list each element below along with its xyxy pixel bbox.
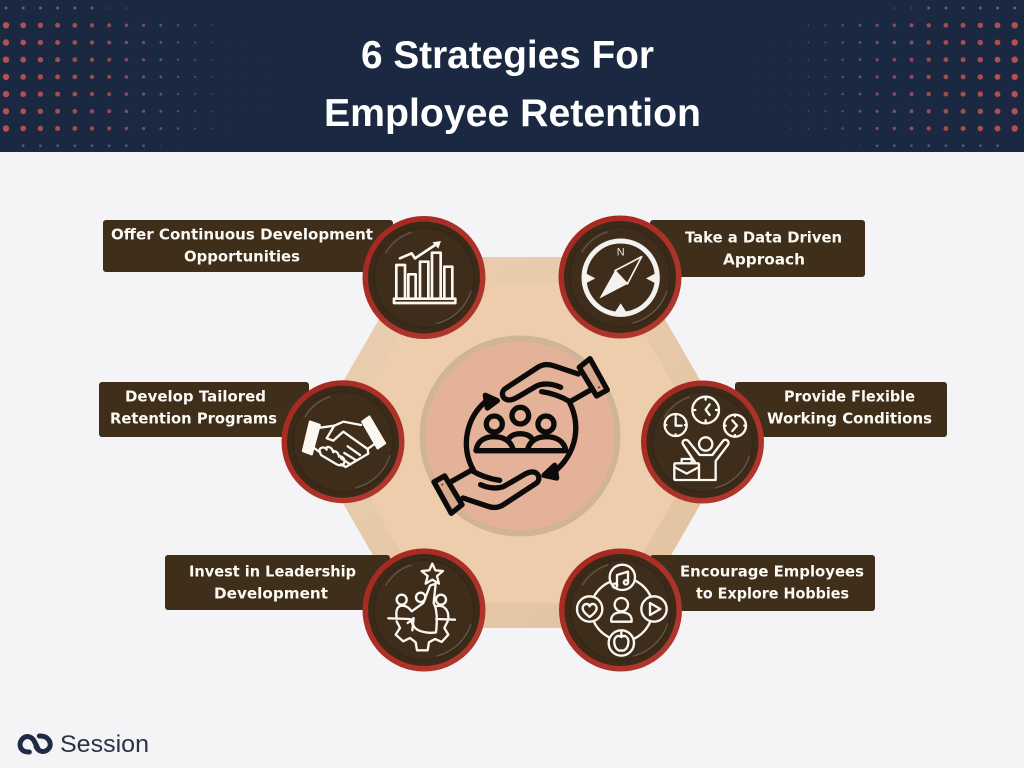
label: Offer Continuous Development Opportunities: Opportunities <box>184 248 300 266</box>
label: Encourage Employees to Explore Hobbies: to Explore Hobbies <box>696 584 849 602</box>
title: 6 Strategies For <box>361 34 654 77</box>
badge: hobbies <box>559 548 682 672</box>
icon: clocks and person <box>665 397 746 480</box>
Session logo <box>20 731 149 758</box>
label: Develop Tailored Retention Programs <box>99 382 309 437</box>
label: Invest in Leadership Development: Invest in Leadership <box>189 562 356 580</box>
badge: compass <box>558 216 682 338</box>
badge: flexible working <box>641 380 764 504</box>
central icon: hands and team <box>434 359 607 513</box>
label: Provide Flexible Working Conditions <box>735 382 947 437</box>
label: Develop Tailored Retention Programs: Develop Tailored <box>125 388 266 406</box>
label: Take a Data Driven Approach: Take a Data Driven <box>685 228 842 246</box>
label: Offer Continuous Development Opportunities <box>103 220 393 272</box>
icon: linked loops <box>20 736 50 752</box>
label: Encourage Employees to Explore Hobbies <box>650 555 875 611</box>
label: Offer Continuous Development Opportunities: Offer Continuous Development <box>111 226 373 244</box>
icon: person with hobbies <box>577 565 667 656</box>
label: Develop Tailored Retention Programs: Retention Programs <box>110 410 277 428</box>
label: Encourage Employees to Explore Hobbies: Encourage Employees <box>680 562 864 580</box>
badge: handshake <box>282 380 404 503</box>
label: Invest in Leadership Development <box>165 555 390 610</box>
label: Invest in Leadership Development: Development <box>214 584 328 602</box>
icon: bar chart <box>394 241 455 303</box>
wordmark: Session <box>60 731 149 758</box>
central hexagon <box>331 277 713 608</box>
dot pattern left <box>6 8 264 146</box>
header band <box>0 0 1024 152</box>
badge: leadership <box>362 548 486 672</box>
icon: star, team and gear <box>388 564 455 650</box>
center circle <box>422 338 618 534</box>
label: Take a Data Driven Approach: Approach <box>723 250 805 268</box>
label: Provide Flexible Working Conditions: Provide Flexible <box>784 388 915 406</box>
icon: compass: N <box>617 247 625 259</box>
label: Provide Flexible Working Conditions: Working Conditions <box>767 410 932 428</box>
upper hand <box>502 359 607 402</box>
title <box>324 34 701 135</box>
icon: handshake <box>303 417 385 467</box>
title: Employee Retention <box>324 92 701 135</box>
badge: growth chart <box>362 216 486 339</box>
label: Take a Data Driven Approach <box>650 220 865 277</box>
dot pattern right <box>757 8 1015 146</box>
lower hand <box>434 470 539 513</box>
